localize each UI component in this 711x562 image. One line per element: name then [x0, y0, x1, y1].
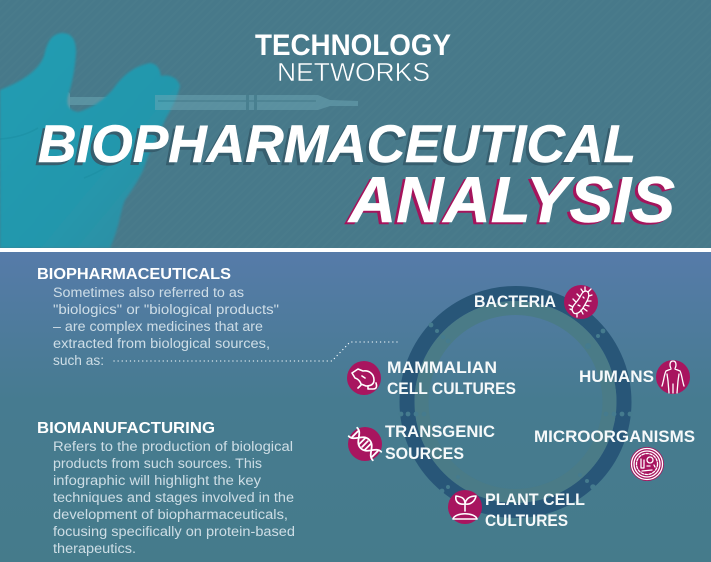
- body: biopharmaceuticals description: Sometimes also referred to as: [53, 285, 244, 300]
- body: biomanufacturing description: focusing specifically on protein-based: [53, 524, 295, 539]
- icon: mouse: [347, 361, 381, 395]
- icon: microorganism dish: [630, 447, 664, 481]
- body: biopharmaceuticals description: extracted from biological sources,: [53, 336, 270, 351]
- item: plant cell cultures: PLANT CELL: [485, 491, 585, 509]
- body: biomanufacturing description: products from such sources. This: [53, 456, 262, 471]
- item: transgenic sources: [348, 423, 495, 463]
- header panel: [0, 0, 711, 248]
- hand crease: [0, 128, 128, 178]
- item: mammalian cell cultures: CELL CULTURES: [387, 380, 516, 398]
- body: biopharmaceuticals description: such as:: [53, 353, 104, 368]
- body: biomanufacturing description: techniques and stages involved in the: [53, 490, 294, 505]
- content panel: [0, 252, 711, 562]
- item: mammalian cell cultures: [347, 359, 516, 398]
- body: biomanufacturing description: Refers to the production of biological: [53, 439, 293, 454]
- body: biomanufacturing description: therapeutics.: [53, 541, 136, 556]
- icon: human body: [656, 360, 690, 394]
- title: Biopharmaceutical: BIOPHARMACEUTICAL: [35, 118, 633, 177]
- icon: syringe barrel: [155, 95, 358, 110]
- ring diagram: [399, 294, 632, 510]
- title: Biopharmaceutical: BIOPHARMACEUTICAL: [38, 115, 636, 174]
- body: biomanufacturing description: infographic will highlight the key: [53, 473, 261, 488]
- item: transgenic sources: TRANSGENIC: [385, 423, 495, 441]
- title: Analysis: ANALYSIS: [344, 165, 672, 238]
- item: mammalian cell cultures: MAMMALIAN: [387, 359, 497, 377]
- item: transgenic sources: SOURCES: [385, 445, 464, 463]
- item: humans: HUMANS: [579, 368, 654, 386]
- title: Analysis: ANALYSIS: [347, 163, 675, 236]
- text block: biomanufacturing: [37, 420, 295, 556]
- icon: plant sprout: [448, 490, 482, 524]
- item: plant cell cultures: CULTURES: [485, 512, 568, 530]
- dotted connector: [114, 342, 398, 361]
- heading: biopharmaceuticals: BIOPHARMACEUTICALS: [37, 266, 231, 283]
- heading: biomanufacturing: BIOMANUFACTURING: [37, 420, 215, 437]
- item: plant cell cultures: [448, 490, 585, 530]
- body: biopharmaceuticals description: – are complex medicines that are: [53, 319, 263, 334]
- body: biopharmaceuticals description: [53, 285, 279, 368]
- text block: biopharmaceuticals: [37, 266, 279, 368]
- icon: gloved hand: [0, 33, 180, 248]
- body: biomanufacturing description: development of biopharmaceuticals,: [53, 507, 288, 522]
- icon: syringe plunger: [65, 92, 158, 112]
- logo: Technology Networks: TECHNOLOGY: [255, 29, 451, 62]
- icon: dna helix: [348, 427, 382, 461]
- item: humans: [579, 360, 690, 394]
- logo: Technology Networks: [255, 29, 451, 87]
- logo: Technology Networks: NETWORKS: [277, 57, 430, 87]
- item: microorganisms: [534, 428, 695, 481]
- body: biopharmaceuticals description: "biologics" or "biological products": [53, 302, 279, 317]
- icon: bacteria: [564, 285, 598, 319]
- item: bacteria: BACTERIA: [474, 293, 556, 311]
- item: bacteria: [474, 285, 598, 319]
- item: microorganisms: MICROORGANISMS: [534, 428, 695, 446]
- body: biomanufacturing description: [53, 439, 295, 556]
